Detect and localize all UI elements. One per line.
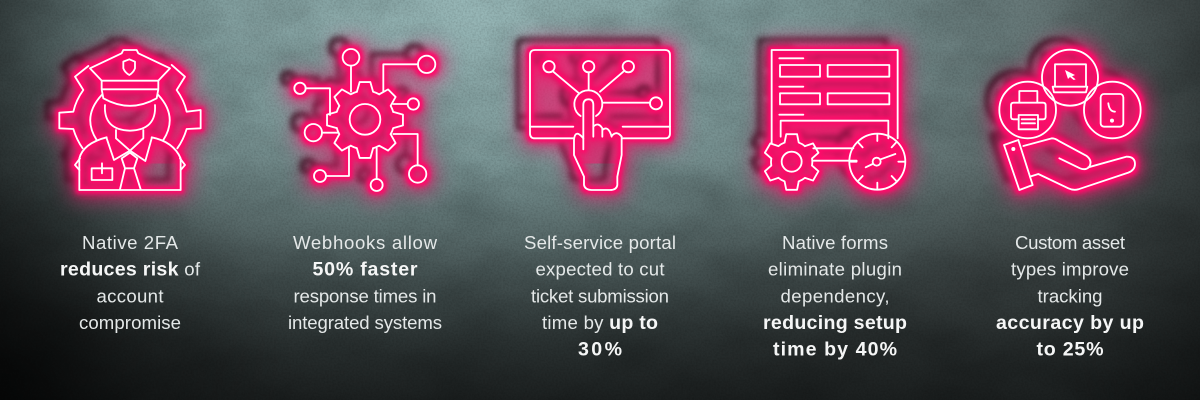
text: native forms [763, 232, 907, 360]
text: custom asset types: Custom asset [1015, 232, 1126, 253]
text: custom asset types: tracking [1038, 285, 1102, 306]
text: webhooks: response times in [294, 285, 436, 306]
text: self-service portal: time by up to [542, 312, 658, 334]
text: webhooks [288, 232, 442, 333]
text: custom asset types: to 25% [1036, 338, 1104, 360]
text: webhooks: Webhooks allow [293, 232, 438, 253]
text: native forms: eliminate plugin [768, 259, 902, 280]
text: native 2FA: Native 2FA [82, 232, 179, 253]
icon: touchscreen portal with pointing hand [530, 50, 670, 190]
text: custom asset types: types improve [1011, 259, 1129, 280]
text: native 2FA: account [96, 285, 164, 306]
text: native 2FA: reduces risk of [60, 259, 201, 281]
text: self-service portal: expected to cut [536, 259, 665, 280]
text: self-service portal: ticket submission [531, 285, 669, 306]
text: webhooks: integrated systems [288, 312, 442, 333]
text: webhooks: 50% faster [312, 259, 418, 281]
text: self-service portal: Self-service portal [524, 232, 676, 253]
text: native forms: time by 40% [773, 338, 897, 360]
icon: gear with webhook connections [294, 49, 435, 191]
icon: hand holding printer, laptop and phone [999, 50, 1141, 190]
text: native forms: reducing setup [763, 312, 907, 334]
text: native 2FA: compromise [79, 312, 181, 333]
icon: police officer with gear [59, 50, 201, 190]
text: custom asset types [996, 232, 1144, 360]
text: native forms: dependency, [780, 285, 890, 306]
text: native forms: Native forms [782, 232, 888, 253]
text: native 2FA [60, 232, 201, 333]
icon: form with gear and stopwatch [761, 50, 905, 190]
text: self-service portal: 30% [578, 338, 622, 360]
text: self-service portal [524, 232, 676, 360]
text: custom asset types: accuracy by up [996, 312, 1144, 334]
